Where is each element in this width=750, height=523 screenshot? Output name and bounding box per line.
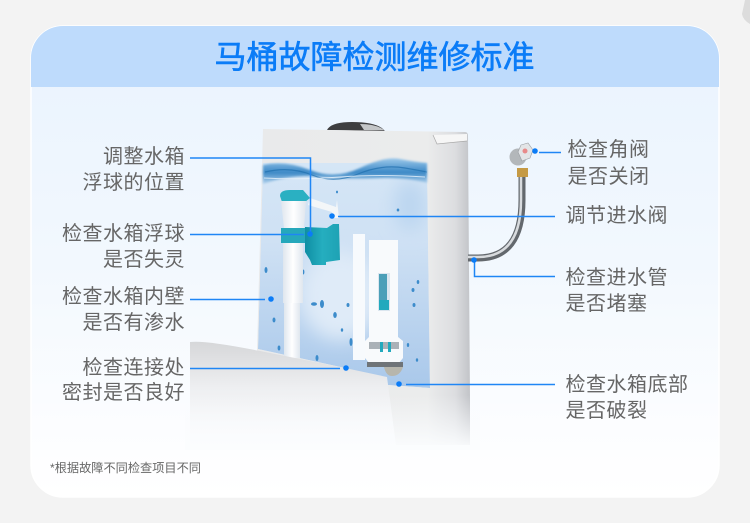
header band (31, 26, 719, 87)
illustration: toilet tank (185, 122, 480, 450)
callout: tank bottom: 检查水箱底部 (566, 373, 688, 396)
callout: float failure: 是否失灵 (103, 248, 185, 271)
valve (510, 148, 526, 166)
callout: inlet valve: 调节进水阀 (566, 204, 668, 227)
callout: float position: 调整水箱 (103, 145, 185, 168)
callout: seal: 检查连接处 (82, 356, 185, 379)
tank body (257, 129, 470, 445)
callout: float failure: 检查水箱浮球 (62, 222, 185, 245)
callout: seal (62, 356, 349, 404)
illustration: angle valve and hose (468, 143, 533, 258)
flush valve (353, 234, 403, 376)
brass nut (517, 168, 528, 177)
callout: inner wall (62, 285, 274, 334)
callout: angle valve (532, 138, 650, 188)
hose (468, 172, 522, 258)
callout: float position (82, 145, 310, 232)
callouts left (62, 145, 349, 404)
title: 马桶故障检测维修标准 (214, 39, 535, 75)
callout: inlet hose: 检查进水管 (566, 266, 668, 289)
callout: seal: 密封是否良好 (62, 381, 185, 404)
corner decoration (742, 0, 750, 24)
callout: float position: 浮球的位置 (82, 171, 185, 194)
toilet seat (190, 342, 396, 445)
callout: tank bottom: 是否破裂 (566, 399, 648, 422)
callout: inner wall: 是否有渗水 (82, 311, 185, 334)
callout: angle valve: 检查角阀 (568, 138, 650, 161)
callout: inlet valve (329, 204, 668, 227)
tank lid button (327, 122, 385, 131)
callouts right (329, 138, 688, 422)
callout: tank bottom (396, 373, 688, 422)
cut-away water window (258, 163, 430, 388)
callout: float failure (62, 222, 313, 271)
callout: inlet hose (471, 257, 668, 315)
water surface (263, 158, 427, 184)
droplets (264, 191, 419, 362)
bottom fade (185, 395, 480, 450)
callout: angle valve: 是否关闭 (568, 165, 650, 188)
fill valve (280, 190, 340, 358)
callout: inlet hose: 是否堵塞 (566, 292, 648, 315)
callout: inner wall: 检查水箱内壁 (62, 285, 185, 308)
footnote: *根据故障不同检查项目不同 (50, 460, 201, 475)
